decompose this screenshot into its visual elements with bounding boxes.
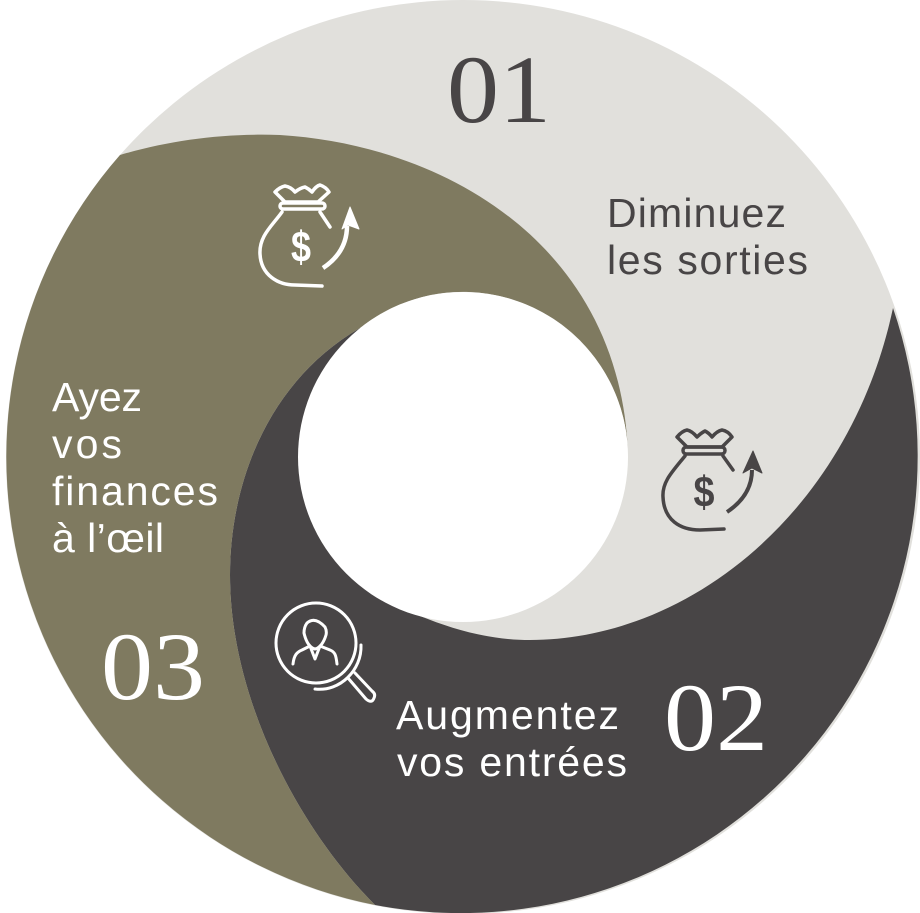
heading: Diminuez les sorties [607,190,808,283]
panel: segment 02 dark [230,308,918,913]
heading: Ayez vos finances à l'œil: Ayez [52,374,142,420]
heading: Diminuez les sorties: les sorties [607,237,808,283]
heading: Ayez vos finances à l'œil [52,374,218,561]
panel: segment 03 olive [6,135,628,905]
heading: Diminuez les sorties: Diminuez [607,190,786,236]
number 03: 03 [101,613,205,720]
heading: Augmentez vos entrées: Augmentez [396,692,619,738]
center hole [298,292,628,622]
heading: Ayez vos finances à l'œil: vos [52,421,122,467]
heading: Ayez vos finances à l'œil: finances [52,468,218,514]
heading: Ayez vos finances à l'œil: à l’œil [52,515,164,561]
heading: Augmentez vos entrées [396,692,627,785]
icon: money bag light: $ [694,468,714,517]
icon: money bag olive: $ [291,223,311,272]
icon: money bag light [663,430,762,530]
number 02: 02 [664,664,768,771]
icon: money bag olive [260,185,359,286]
heading: Augmentez vos entrées: vos entrées [397,739,627,785]
number 01: 01 [447,36,551,143]
icon: person magnifier [276,603,375,701]
